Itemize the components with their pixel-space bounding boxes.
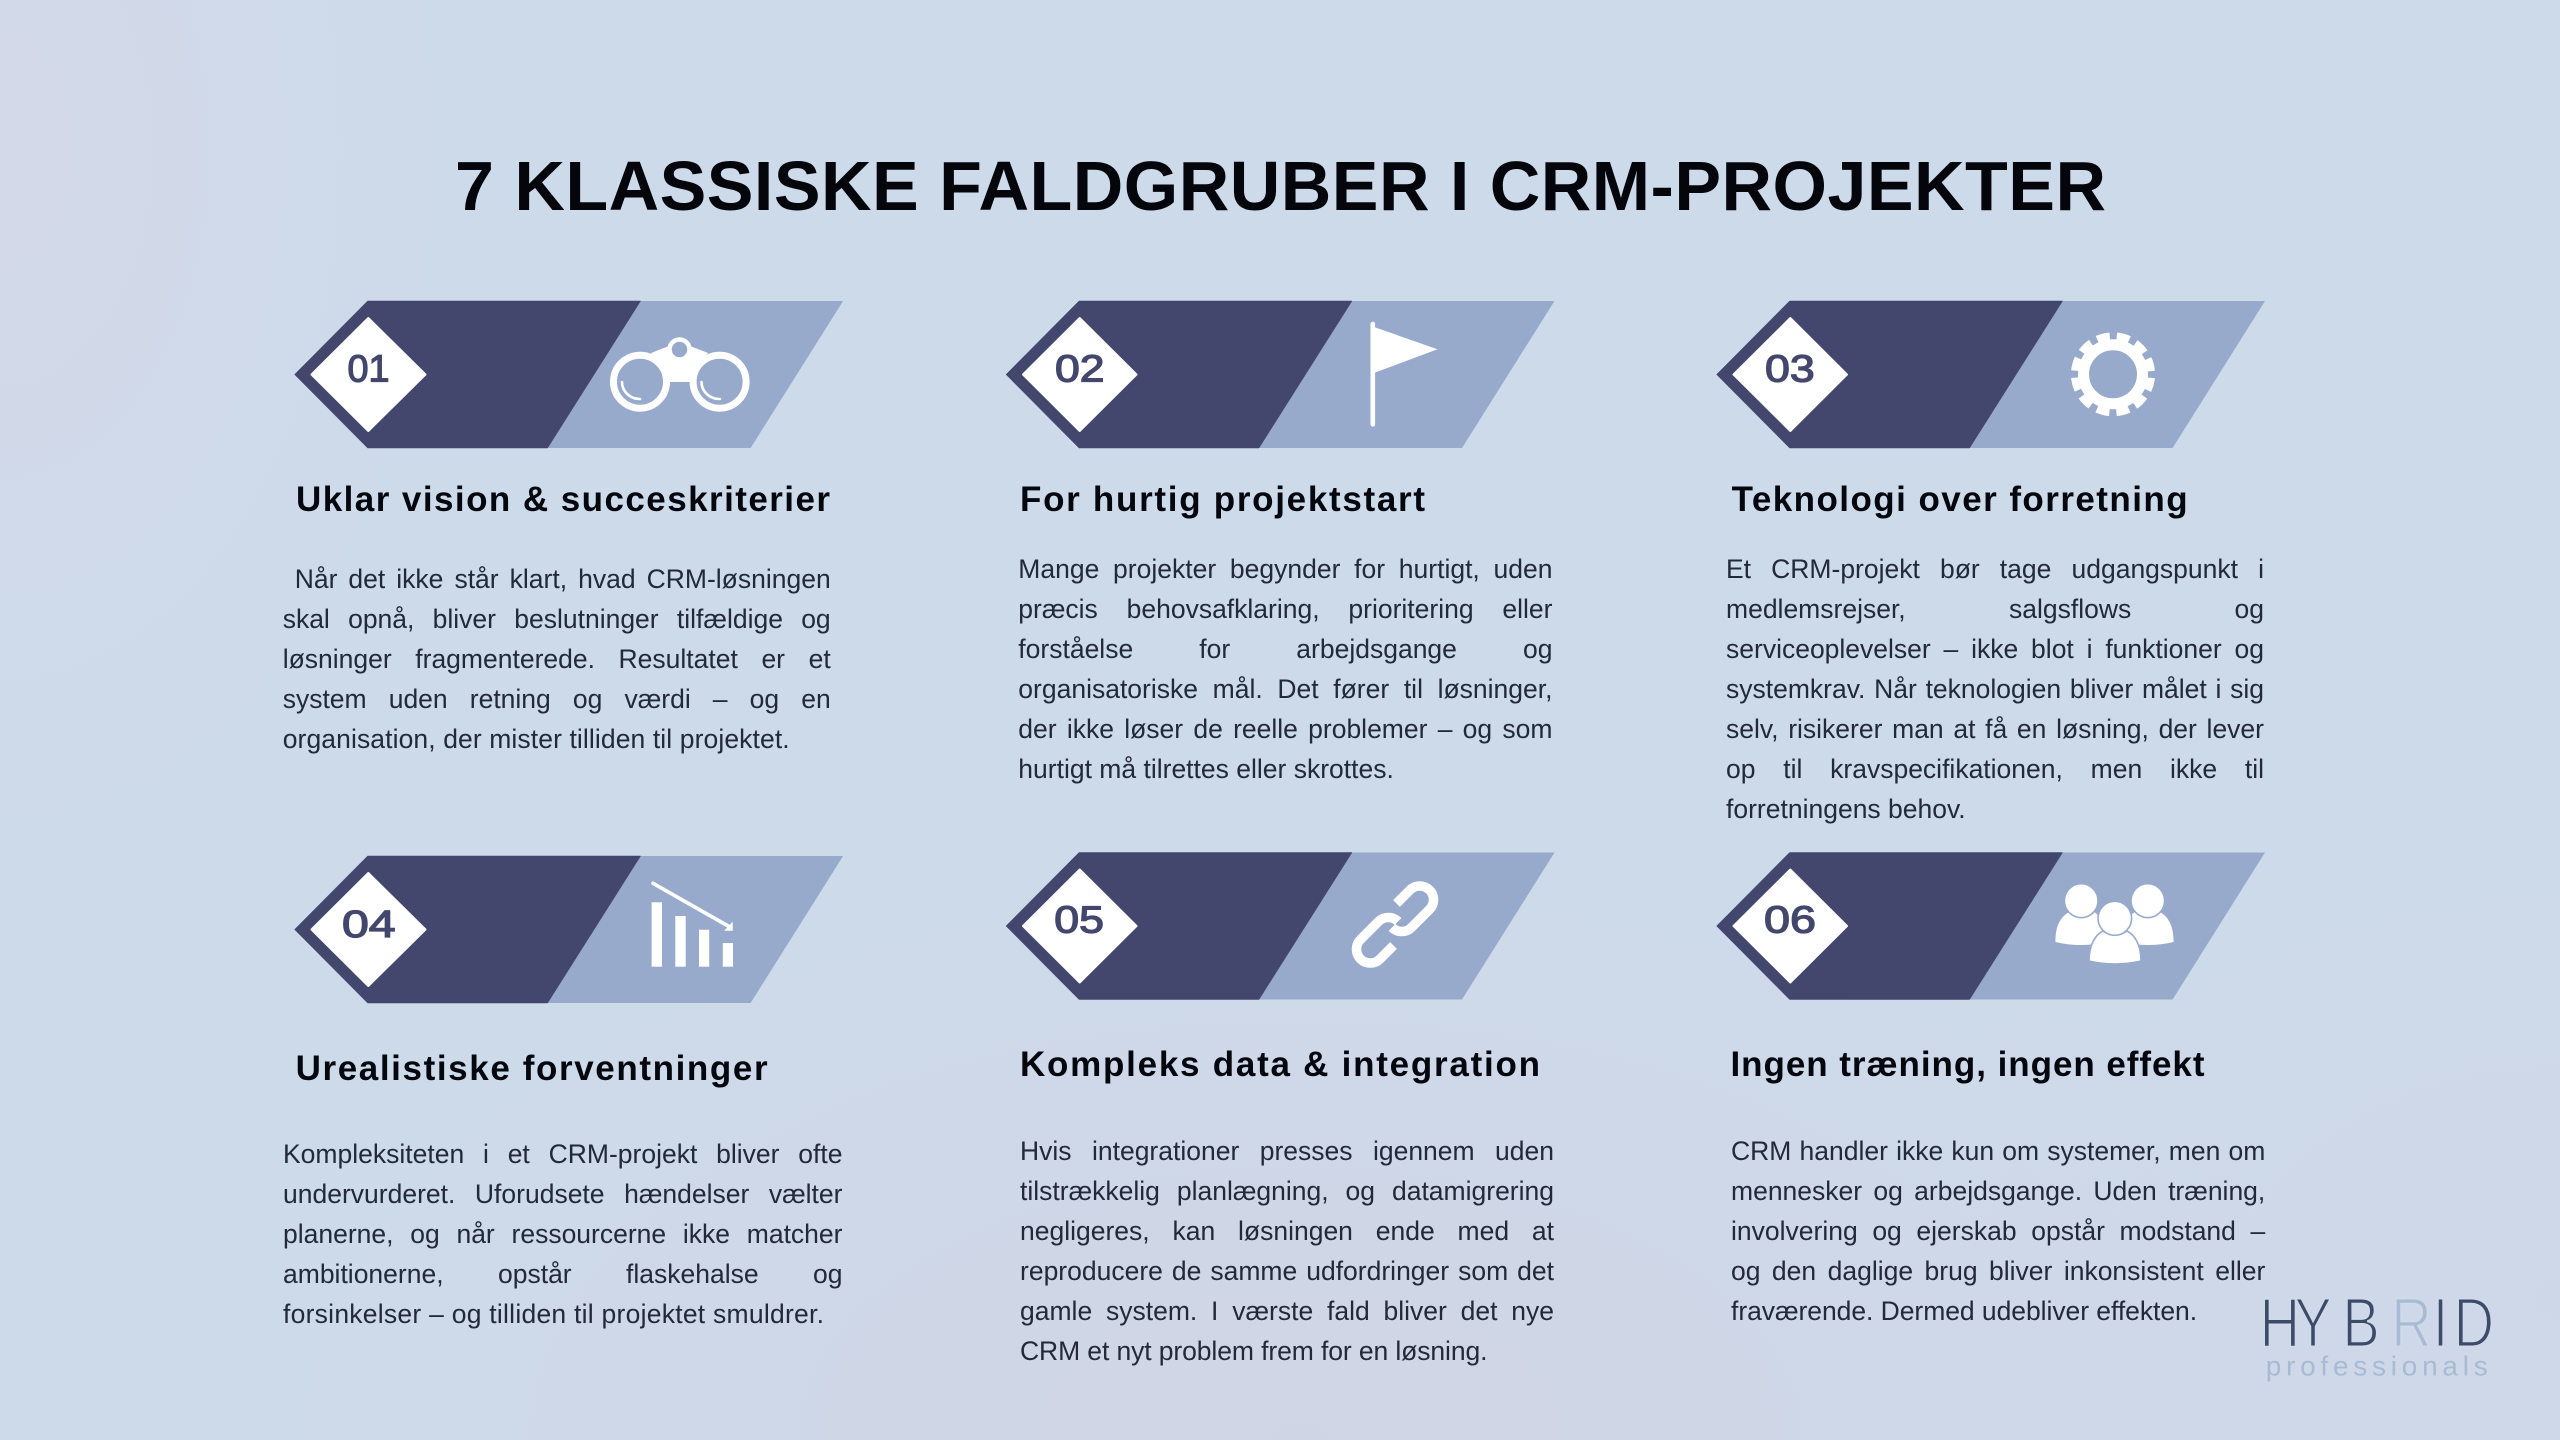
number badge 02: 02	[1055, 349, 1104, 391]
number badge 04	[312, 873, 426, 986]
banner light segment	[1970, 301, 2265, 448]
heading 04: Urealistiske forventninger	[296, 1050, 768, 1088]
number badge 05	[1023, 870, 1136, 982]
text 02: Mange projekter begynder for hurtigt, uden	[1018, 554, 1552, 584]
text 06: involvering og ejerskab opstår modstand –	[1731, 1216, 2265, 1246]
banner dark segment	[1717, 301, 2063, 448]
text 04: undervurderet. Uforudsete hændelser vælter	[283, 1179, 842, 1209]
text 03: op til kravspecifikationen, men ikke til	[1726, 754, 2264, 784]
text 02: hurtigt må tilrettes eller skrottes.	[1018, 754, 1394, 784]
text 05: tilstrækkelig planlægning, og datamigrering	[1020, 1176, 1554, 1206]
banner 05	[1006, 852, 1554, 1000]
icon: flag	[1370, 322, 1438, 427]
number badge 04: 04	[342, 904, 396, 946]
text 01: system uden retning og værdi – og en	[283, 684, 831, 714]
icon: binoculars	[614, 340, 746, 408]
text 01: Når det ikke står klart, hvad CRM-løsningen	[295, 564, 831, 594]
text 03: selv, risikerer man at få en løsning, der lever	[1726, 714, 2264, 744]
text 05: gamle system. I værste fald bliver det nye	[1020, 1296, 1554, 1326]
icon: group of people	[2055, 884, 2174, 964]
icon: gear	[2076, 337, 2150, 411]
text 02: forståelse for arbejdsgange og	[1018, 634, 1552, 664]
text 02: organisatoriske mål. Det fører til løsninger,	[1018, 674, 1552, 704]
text 05: CRM et nyt problem frem for en løsning.	[1020, 1336, 1487, 1366]
icon: declining bar chart	[652, 883, 733, 967]
text 03: systemkrav. Når teknologien bliver målet i sig	[1726, 674, 2264, 704]
banner dark segment	[295, 856, 641, 1003]
text 04: forsinkelser – og tilliden til projektet smuldrer.	[283, 1299, 824, 1329]
text 04: Kompleksiteten i et CRM-projekt bliver ofte	[283, 1139, 842, 1169]
banner light segment	[548, 856, 843, 1003]
banner 03	[1716, 300, 2265, 448]
heading 01: Uklar vision & succeskriterier	[296, 480, 830, 519]
text 04: planerne, og når ressourcerne ikke matcher	[283, 1219, 842, 1249]
text 03	[1726, 554, 2264, 824]
number badge 03: 03	[1765, 349, 1815, 391]
text 02: der ikke løser de reelle problemer – og som	[1018, 714, 1552, 744]
banner light segment	[548, 301, 843, 448]
text 03: medlemsrejser, salgsflows og	[1726, 594, 2264, 624]
banner light segment	[1259, 301, 1554, 448]
text 01: skal opnå, bliver beslutninger tilfældige og	[283, 604, 831, 634]
text 05	[1020, 1136, 1554, 1366]
number badge 05: 05	[1054, 900, 1104, 942]
text 01	[283, 564, 831, 754]
panel: 04 urealistiske forventninger	[283, 856, 843, 1329]
banner dark segment	[295, 301, 641, 448]
banner dark segment	[1006, 852, 1352, 1000]
text 06: mennesker og arbejdsgange. Uden træning,	[1731, 1176, 2265, 1206]
text 05: Hvis integrationer presses igennem uden	[1020, 1136, 1554, 1166]
text 04: ambitionerne, opstår flaskehalse og	[283, 1259, 842, 1289]
logo: Hybrid professionals	[2260, 1290, 2492, 1382]
heading 02: For hurtig projektstart	[1020, 480, 1425, 519]
text 06: fraværende. Dermed udebliver effekten.	[1731, 1296, 2197, 1326]
number badge 02	[1023, 318, 1136, 431]
text 03: forretningens behov.	[1726, 794, 1966, 824]
number badge 01	[312, 318, 426, 431]
number badge 01: 01	[348, 349, 390, 391]
text 03: Et CRM-projekt bør tage udgangspunkt i	[1726, 554, 2264, 584]
number badge 06: 06	[1764, 900, 1816, 942]
banner 02	[1006, 300, 1554, 448]
heading 05: Kompleks data & integration	[1020, 1045, 1540, 1084]
text 05: reproducere de samme udfordringer som det	[1020, 1256, 1554, 1286]
icon: chain link	[1351, 880, 1439, 969]
panel: 06 ingen træning	[1716, 852, 2266, 1326]
heading 06: Ingen træning, ingen effekt	[1730, 1045, 2205, 1084]
logo wordmark	[2260, 1285, 2494, 1362]
text 05: negligeres, kan løsningen ende med at	[1020, 1216, 1554, 1246]
banner light segment	[1970, 852, 2265, 1000]
number badge 06	[1734, 870, 1847, 982]
banner dark segment	[1717, 852, 2063, 1000]
banner 01	[294, 300, 843, 448]
text 02: præcis behovsafklaring, prioritering eller	[1018, 594, 1552, 624]
banner 06	[1716, 852, 2265, 1000]
banner light segment	[1259, 852, 1554, 1000]
panel: 02 for hurtig projektstart	[1006, 300, 1554, 784]
text 06: CRM handler ikke kun om systemer, men om	[1731, 1136, 2265, 1166]
text 03: serviceoplevelser – ikke blot i funktioner og	[1726, 634, 2264, 664]
panel: 01 uklar vision	[283, 300, 843, 754]
heading 03: Teknologi over forretning	[1732, 480, 2188, 519]
panel: 05 kompleks data	[1006, 852, 1554, 1366]
banner 04	[294, 856, 843, 1004]
text 02	[1018, 554, 1552, 784]
text 04	[283, 1139, 842, 1329]
logo tagline: professionals	[2266, 1351, 2488, 1382]
text 06	[1731, 1136, 2266, 1326]
number badge 03	[1734, 318, 1847, 431]
text 01: organisation, der mister tilliden til projektet.	[283, 724, 790, 754]
text 06: og den daglige brug bliver inkonsistent eller	[1731, 1256, 2265, 1286]
panel: 03 teknologi over forretning	[1716, 300, 2265, 824]
title: 7 KLASSISKE FALDGRUBER I CRM-PROJEKTER	[455, 147, 2106, 225]
banner dark segment	[1006, 301, 1352, 448]
text 01: løsninger fragmenterede. Resultatet er et	[283, 644, 831, 674]
